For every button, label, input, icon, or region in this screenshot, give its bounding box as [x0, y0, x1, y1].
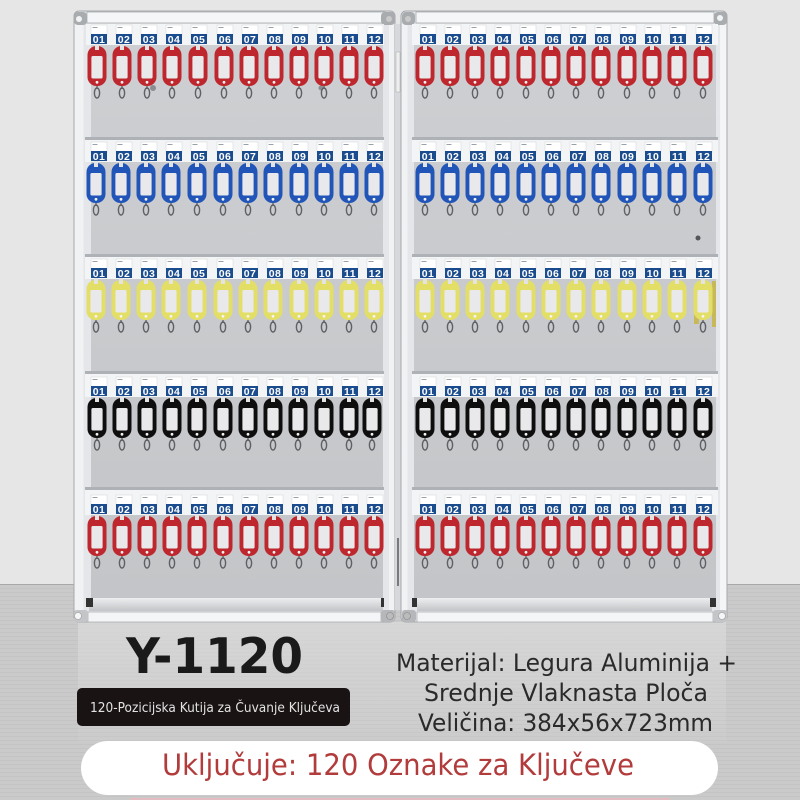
left door row 2: blue key tags 01-12: 05	[193, 151, 205, 163]
right door row 2: blue key tags 01-12: 09	[622, 151, 634, 163]
right door row 4: black key tags 01-12: 07	[572, 386, 584, 398]
right door row 2: blue key tags 01-12: 08	[597, 151, 609, 163]
left door row 1: red key tags 01-12: 09	[294, 34, 306, 46]
panel: right cabinet door	[401, 11, 727, 622]
right door row 2: blue key tags 01-12: 12	[698, 151, 710, 163]
right door row 5: red key tags 01-12: 11	[672, 504, 684, 516]
left door row 4: black key tags 01-12: 03	[143, 386, 155, 398]
right door row 5: red key tags 01-12: 12	[698, 504, 710, 516]
right door row 5: red key tags 01-12: 08	[597, 504, 609, 516]
right door row 2: blue key tags 01-12: 07	[572, 151, 584, 163]
right door row 5: red key tags 01-12: 04	[497, 504, 509, 516]
right door row 3: yellow key tags 01-12: 12	[698, 268, 710, 280]
right door row 5: red key tags 01-12: 10	[647, 504, 659, 516]
right door row 1: red key tags 01-12	[416, 25, 712, 98]
right door row 5: red key tags 01-12: 06	[547, 504, 559, 516]
left door row 5: red key tags 01-12: 07	[244, 504, 256, 516]
material and size specifications: Veličina: 384x56x723mm	[418, 709, 713, 737]
right door row 3: yellow key tags 01-12: 10	[647, 268, 659, 280]
right door row 3: yellow key tags 01-12: 07	[572, 268, 584, 280]
product name badge: 120-Pozicijska Kutija za Čuvanje Ključeva	[90, 698, 340, 716]
right door row 4: black key tags 01-12: 02	[447, 386, 459, 398]
right door row 4: black key tags 01-12: 09	[622, 386, 634, 398]
product name badge	[77, 688, 350, 726]
right door row 4: black key tags 01-12: 05	[522, 386, 534, 398]
left door row 5: red key tags 01-12	[88, 495, 384, 568]
right door row 2: blue key tags 01-12: 05	[522, 151, 534, 163]
left door row 1: red key tags 01-12: 10	[319, 34, 331, 46]
left door row 2: blue key tags 01-12: 03	[143, 151, 155, 163]
left door row 5: red key tags 01-12: 02	[118, 504, 130, 516]
left door row 4: black key tags 01-12: 06	[219, 386, 231, 398]
hinge strip	[395, 24, 401, 610]
right door row 2: blue key tags 01-12: 11	[672, 151, 684, 163]
background wall	[0, 0, 800, 584]
left door row 5: red key tags 01-12: 11	[344, 504, 356, 516]
right door row 3: yellow key tags 01-12: 01	[422, 268, 434, 280]
left door row 3: yellow key tags 01-12: 06	[219, 268, 231, 280]
left door row 4: black key tags 01-12: 08	[269, 386, 281, 398]
left door row 4: black key tags 01-12: 10	[319, 386, 331, 398]
left door row 2: blue key tags 01-12: 10	[319, 151, 331, 163]
left door row 4: black key tags 01-12: 12	[369, 386, 381, 398]
right door row 2: blue key tags 01-12: 03	[472, 151, 484, 163]
left door row 1: red key tags 01-12: 08	[269, 34, 281, 46]
right door row 1: red key tags 01-12: 03	[472, 34, 484, 46]
left door row 5: red key tags 01-12: 03	[143, 504, 155, 516]
left door row 3: yellow key tags 01-12: 10	[319, 268, 331, 280]
left door row 3: yellow key tags 01-12	[86, 259, 384, 332]
includes callout pill: Uključuje: 120 Oznake za Ključeve	[162, 748, 634, 782]
right door row 4: black key tags 01-12: 06	[547, 386, 559, 398]
left door row 2: blue key tags 01-12	[86, 142, 384, 215]
left door row 2: blue key tags 01-12: 04	[168, 151, 180, 163]
panel: left cabinet door	[74, 11, 395, 622]
right door row 4: black key tags 01-12	[416, 377, 712, 450]
left door row 2: blue key tags 01-12: 08	[269, 151, 281, 163]
right door row 1: red key tags 01-12: 02	[447, 34, 459, 46]
right door row 1: red key tags 01-12: 04	[497, 34, 509, 46]
left door row 1: red key tags 01-12: 02	[118, 34, 130, 46]
left door row 1: red key tags 01-12: 03	[143, 34, 155, 46]
left door row 4: black key tags 01-12: 02	[118, 386, 130, 398]
left door row 1: red key tags 01-12: 11	[344, 34, 356, 46]
right door row 1: red key tags 01-12: 05	[522, 34, 534, 46]
left door row 4: black key tags 01-12: 01	[93, 386, 105, 398]
right door row 5: red key tags 01-12: 03	[472, 504, 484, 516]
left door row 3: yellow key tags 01-12: 03	[143, 268, 155, 280]
left door row 2: blue key tags 01-12: 01	[93, 151, 105, 163]
left door row 5: red key tags 01-12: 08	[269, 504, 281, 516]
material and size specifications: Materijal: Legura Aluminija +	[396, 649, 737, 677]
right door row 5: red key tags 01-12: 02	[447, 504, 459, 516]
left door row 3: yellow key tags 01-12: 12	[369, 268, 381, 280]
right door row 4: black key tags 01-12: 10	[647, 386, 659, 398]
right door row 2: blue key tags 01-12: 06	[547, 151, 559, 163]
right door row 3: yellow key tags 01-12: 11	[672, 268, 684, 280]
right door row 3: yellow key tags 01-12: 09	[622, 268, 634, 280]
left door row 1: red key tags 01-12: 07	[244, 34, 256, 46]
left door row 1: red key tags 01-12	[88, 25, 384, 98]
right door row 5: red key tags 01-12: 01	[422, 504, 434, 516]
right door row 1: red key tags 01-12: 06	[547, 34, 559, 46]
left door row 3: yellow key tags 01-12: 05	[193, 268, 205, 280]
right door row 4: black key tags 01-12: 08	[597, 386, 609, 398]
right door row 2: blue key tags 01-12	[416, 142, 712, 215]
right door row 5: red key tags 01-12	[416, 495, 712, 568]
door reflection	[78, 622, 726, 742]
left door row 3: yellow key tags 01-12: 01	[93, 268, 105, 280]
left door row 5: red key tags 01-12: 06	[219, 504, 231, 516]
left door row 1: red key tags 01-12: 05	[193, 34, 205, 46]
material and size specifications: Srednje Vlaknasta Ploča	[424, 679, 708, 707]
right door row 5: red key tags 01-12: 09	[622, 504, 634, 516]
left door row 2: blue key tags 01-12: 07	[244, 151, 256, 163]
left door row 5: red key tags 01-12: 01	[93, 504, 105, 516]
left door row 4: black key tags 01-12: 04	[168, 386, 180, 398]
left door row 1: red key tags 01-12: 04	[168, 34, 180, 46]
left door row 5: red key tags 01-12: 10	[319, 504, 331, 516]
left door row 3: yellow key tags 01-12: 09	[294, 268, 306, 280]
right door row 3: yellow key tags 01-12: 08	[597, 268, 609, 280]
left door row 4: black key tags 01-12	[88, 377, 383, 450]
left door row 5: red key tags 01-12: 04	[168, 504, 180, 516]
left door row 2: blue key tags 01-12: 06	[219, 151, 231, 163]
right door row 5: red key tags 01-12: 07	[572, 504, 584, 516]
right door row 2: blue key tags 01-12: 02	[447, 151, 459, 163]
material and size specifications	[396, 649, 737, 737]
right door row 3: yellow key tags 01-12	[416, 259, 712, 332]
floor	[0, 584, 800, 800]
right door row 5: red key tags 01-12: 05	[522, 504, 534, 516]
right door row 4: black key tags 01-12: 04	[497, 386, 509, 398]
left door row 2: blue key tags 01-12: 12	[369, 151, 381, 163]
left door row 1: red key tags 01-12: 06	[219, 34, 231, 46]
left door row 4: black key tags 01-12: 09	[294, 386, 306, 398]
left door row 2: blue key tags 01-12: 09	[294, 151, 306, 163]
left door row 3: yellow key tags 01-12: 02	[118, 268, 130, 280]
left door row 1: red key tags 01-12: 12	[369, 34, 381, 46]
right door row 1: red key tags 01-12: 01	[422, 34, 434, 46]
right door row 3: yellow key tags 01-12: 02	[447, 268, 459, 280]
left door row 4: black key tags 01-12: 07	[244, 386, 256, 398]
left door row 3: yellow key tags 01-12: 08	[269, 268, 281, 280]
icon: door lock behind yellow tag	[694, 281, 716, 327]
right door row 4: black key tags 01-12: 11	[672, 386, 684, 398]
right door row 2: blue key tags 01-12: 04	[497, 151, 509, 163]
right door row 4: black key tags 01-12: 12	[698, 386, 710, 398]
right door row 1: red key tags 01-12: 08	[597, 34, 609, 46]
left door row 2: blue key tags 01-12: 11	[344, 151, 356, 163]
includes callout pill	[81, 741, 718, 795]
right door row 3: yellow key tags 01-12: 03	[472, 268, 484, 280]
left door row 4: black key tags 01-12: 05	[193, 386, 205, 398]
right door row 2: blue key tags 01-12: 10	[647, 151, 659, 163]
model number heading: Y-1120	[125, 628, 303, 685]
left door row 4: black key tags 01-12: 11	[344, 386, 356, 398]
right door row 4: black key tags 01-12: 03	[472, 386, 484, 398]
left door row 5: red key tags 01-12: 05	[193, 504, 205, 516]
right door row 4: black key tags 01-12: 01	[422, 386, 434, 398]
right door row 1: red key tags 01-12: 10	[647, 34, 659, 46]
right door row 2: blue key tags 01-12: 01	[422, 151, 434, 163]
right door row 3: yellow key tags 01-12: 05	[522, 268, 534, 280]
left door row 1: red key tags 01-12: 01	[93, 34, 105, 46]
left door row 5: red key tags 01-12: 09	[294, 504, 306, 516]
left door row 2: blue key tags 01-12: 02	[118, 151, 130, 163]
left door row 3: yellow key tags 01-12: 11	[344, 268, 356, 280]
right door row 3: yellow key tags 01-12: 04	[497, 268, 509, 280]
left door row 3: yellow key tags 01-12: 04	[168, 268, 180, 280]
left door row 3: yellow key tags 01-12: 07	[244, 268, 256, 280]
right door row 3: yellow key tags 01-12: 06	[547, 268, 559, 280]
right door row 1: red key tags 01-12: 12	[698, 34, 710, 46]
left door row 5: red key tags 01-12: 12	[369, 504, 381, 516]
right door row 1: red key tags 01-12: 09	[622, 34, 634, 46]
right door row 1: red key tags 01-12: 11	[672, 34, 684, 46]
right door row 1: red key tags 01-12: 07	[572, 34, 584, 46]
